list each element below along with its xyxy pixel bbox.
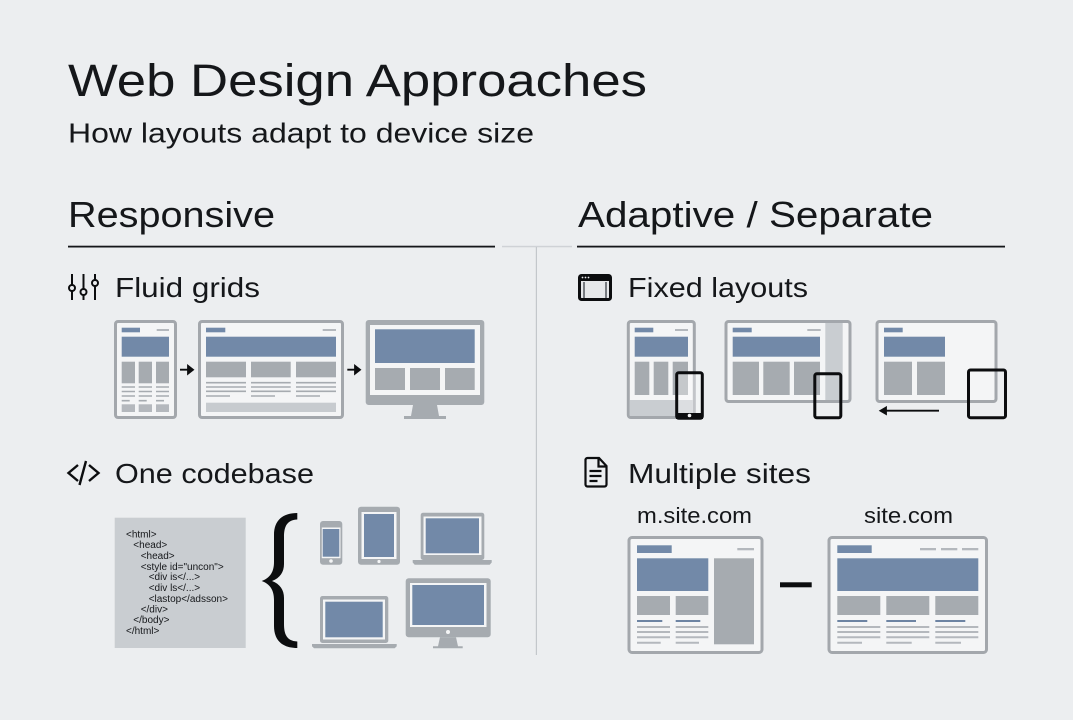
arrow: left	[880, 408, 939, 414]
panel: responsive	[68, 194, 495, 648]
panel: adaptive / separate	[577, 194, 1006, 652]
arrow	[180, 366, 193, 374]
curly brace	[262, 513, 297, 648]
code block: <lastop</adsson>	[149, 594, 228, 605]
icon: tablet	[358, 507, 400, 565]
wireframe: mobile site	[629, 538, 762, 652]
subtitle: How layouts adapt to device size	[68, 118, 534, 148]
icon: phone overlay	[676, 373, 703, 419]
code block: </html>	[126, 626, 160, 637]
icon: tablet outline	[815, 374, 841, 418]
title: Web Design Approaches	[68, 55, 647, 106]
code block: <head>	[141, 551, 175, 562]
label: site.com: site.com	[864, 503, 953, 528]
heading: adaptive / separate: Adaptive / Separate	[578, 194, 933, 235]
label: fluid grids: Fluid grids	[115, 272, 260, 303]
icon: phone	[320, 521, 342, 565]
icon: sliders	[69, 274, 98, 300]
label: one codebase: One codebase	[115, 458, 314, 489]
wireframe: desktop monitor	[366, 320, 484, 419]
icon: browser window	[579, 275, 611, 300]
code block: <div ls</...>	[149, 583, 200, 594]
code block: <html>	[126, 530, 157, 540]
code block: <style id="uncon">	[141, 562, 224, 573]
wireframe: medium page	[200, 322, 342, 418]
icon: tablet outline	[968, 370, 1006, 418]
icon: document	[586, 458, 606, 486]
label: multiple sites: Multiple sites	[628, 458, 811, 489]
label: m.site.com: m.site.com	[637, 503, 752, 528]
arrow	[347, 366, 360, 374]
code block	[115, 518, 246, 648]
connector dash	[780, 582, 812, 587]
subsection: fixed layouts	[579, 272, 1006, 419]
subsection: fluid grids	[69, 272, 484, 419]
subsection: multiple sites	[586, 458, 986, 652]
icon: laptop small	[413, 513, 492, 565]
label: fixed layouts: Fixed layouts	[628, 272, 808, 303]
wireframe: desktop site	[829, 538, 986, 652]
code block: </body>	[133, 615, 170, 626]
icon: desktop	[406, 578, 491, 648]
wireframe: fixed page with tablet	[726, 322, 850, 418]
icon: code brackets	[68, 461, 98, 485]
wireframe: narrow page	[116, 322, 176, 418]
icon: laptop large	[312, 596, 397, 648]
heading: responsive: Responsive	[68, 194, 275, 235]
code block: <head>	[133, 540, 167, 551]
divider	[502, 246, 572, 655]
subsection: one codebase	[68, 458, 492, 648]
wireframe: fixed page with offset device	[877, 322, 1006, 418]
wireframe: fixed page with phone	[628, 322, 703, 419]
code block: <div is</...>	[149, 572, 200, 583]
code block: </div>	[141, 604, 168, 616]
